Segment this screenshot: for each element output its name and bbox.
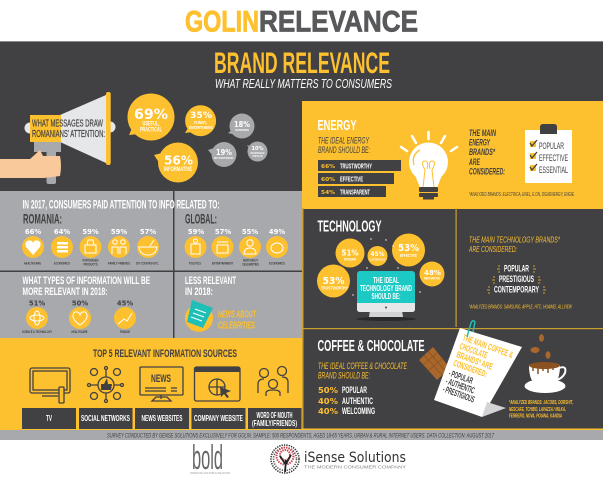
panel: coffee & chocolate: WELCOMING bbox=[342, 406, 375, 417]
panel: energy: EFFECTIVE bbox=[340, 174, 363, 184]
icon: monitor bbox=[356, 271, 416, 321]
survey note bar bbox=[0, 430, 603, 440]
paper clip bbox=[467, 321, 475, 337]
panel: attention topics: MORE RELEVANT IN 2018: bbox=[22, 286, 108, 298]
panel: coffee & chocolate: 40% bbox=[318, 397, 338, 406]
energy brands heading: CONSIDERED: bbox=[469, 166, 505, 178]
coffee brands footnote: FERRERO, NOVA, POIANA, KANDIA bbox=[509, 414, 562, 420]
bubble: 69% useful: PRACTICAL bbox=[140, 128, 162, 134]
panel: coffee & chocolate bbox=[302, 321, 603, 430]
tech bubble labels: 53% bbox=[398, 243, 419, 254]
panel: top 5 sources: SOCIAL NETWORKS bbox=[81, 414, 130, 423]
panel: top 5 sources: TV bbox=[46, 414, 52, 423]
bubble: 69% useful: USEFUL, bbox=[142, 122, 160, 128]
icon: news page bbox=[185, 300, 213, 332]
panel: attention topics: WHAT TYPES OF INFORMATION WILL BE bbox=[22, 275, 150, 287]
topic percentages: 59% bbox=[188, 228, 204, 236]
tech bubble labels: INNOVATIVE bbox=[424, 276, 441, 280]
panel: coffee & chocolate: THE IDEAL COFFEE & CHOCOLATE bbox=[318, 361, 407, 372]
tech bubble labels: CUSTOMIZABLE bbox=[370, 258, 386, 262]
topic percentages: 49% bbox=[269, 228, 285, 236]
bubble: 35% funny: 35% bbox=[190, 111, 212, 121]
icon: monitor: THE IDEAL bbox=[373, 275, 399, 285]
bubble: 10%: POPULAR bbox=[252, 154, 262, 158]
panel: energy: TRUSTWORTHY bbox=[340, 162, 372, 170]
panel: attention topics: GLOBAL: bbox=[185, 210, 217, 226]
icon: monitor: SHOULD BE: bbox=[372, 291, 401, 301]
tech bubble labels: 53% bbox=[322, 276, 344, 287]
panel: attention topics bbox=[0, 191, 302, 338]
topic percentages: 59% bbox=[111, 228, 127, 236]
icon: light bulb bbox=[401, 132, 457, 200]
energy brands heading: BRANDS* bbox=[469, 147, 496, 158]
tech bubble labels: TRUSTWORTHY bbox=[321, 286, 348, 290]
topic percentages: 59% bbox=[82, 228, 99, 236]
panel: top 5 sources: WORD OF MOUTH bbox=[256, 411, 293, 420]
logo: Golin Relevance bbox=[185, 6, 418, 38]
bubble: 35% funny: ENTERTAINING bbox=[189, 125, 213, 130]
topic labels: NEWS ABOUT bbox=[243, 258, 259, 262]
topic percentages: 64% bbox=[54, 228, 70, 236]
tech bubble labels bbox=[321, 243, 441, 290]
clipboard bbox=[525, 124, 572, 183]
note paper: BRANDS* ARE bbox=[455, 349, 494, 372]
source icons bbox=[30, 366, 288, 403]
topic labels: POLITICS bbox=[189, 262, 201, 266]
panel: energy: TRANSPARENT bbox=[340, 188, 370, 196]
bubble: 18%: SURPRISING bbox=[235, 128, 249, 132]
panel: technology: TECHNOLOGY bbox=[318, 219, 382, 236]
topic percentages: 57% bbox=[140, 228, 156, 236]
panel: attention topics: 45% bbox=[117, 300, 133, 308]
panel: coffee & chocolate: BRAND SHOULD BE: bbox=[318, 370, 370, 382]
forecast labels: FINANCE bbox=[120, 330, 130, 334]
panel: energy: 54% bbox=[321, 190, 336, 196]
bubble: 10%: 10% bbox=[252, 146, 264, 152]
coffee brands footnote: NESCAFE, TCHIBO, LAVAZZA / MILKA, bbox=[509, 407, 566, 413]
panel: attention topics: NEWS ABOUT bbox=[218, 310, 256, 321]
panel: energy: 60% bbox=[321, 177, 336, 183]
panel: coffee & chocolate: 50% bbox=[318, 386, 338, 395]
panel: attention topics: ROMANIA: bbox=[23, 210, 62, 226]
panel: top 5 sources: NEWS WEBSITES bbox=[142, 414, 183, 423]
forecast labels bbox=[22, 330, 130, 334]
bubble: 56% informative: 56% bbox=[164, 154, 193, 168]
source labels bbox=[22, 408, 302, 429]
megaphone with question: WHAT MESSAGES DRAW bbox=[32, 119, 103, 130]
bubble: 18% bbox=[228, 114, 254, 138]
note paper: CHOCOLATE bbox=[458, 341, 489, 360]
technology brand attributes: PRESTIGIOUS bbox=[499, 274, 534, 285]
logo: bold: bold bbox=[192, 439, 223, 477]
bubble: 18%: 18% bbox=[234, 120, 250, 129]
energy bars bbox=[318, 160, 401, 197]
note paper: - PRESTIGIOUS bbox=[442, 384, 476, 405]
panel: coffee & chocolate: COFFEE & CHOCOLATE bbox=[318, 338, 424, 355]
panel: top 5 sources: (FAMILY/FRIENDS) bbox=[252, 419, 297, 428]
topic labels: ECONOMICS bbox=[269, 262, 285, 266]
panel: top 5 sources: COMPANY WEBSITE bbox=[194, 414, 243, 423]
topic icons bbox=[25, 240, 68, 255]
note paper: - POPULAR bbox=[447, 368, 475, 386]
clipboard: POPULAR bbox=[539, 141, 564, 152]
panel: coffee & chocolate: AUTHENTIC bbox=[342, 396, 373, 407]
logo: iSense Solutions bbox=[270, 444, 406, 474]
panel: attention topics: 50% bbox=[72, 300, 88, 308]
panel: coffee & chocolate: 40% bbox=[318, 407, 338, 416]
clipboard: EFFECTIVE bbox=[539, 153, 568, 164]
logo: Golin Relevance: GOLIN bbox=[185, 6, 259, 38]
icon: chocolate bbox=[419, 347, 450, 380]
note paper: - AUTHENTIC bbox=[444, 376, 476, 396]
energy brands heading: ENERGY bbox=[469, 138, 491, 148]
bubble: 35% funny bbox=[185, 105, 216, 136]
panel: attention topics: IN 2018: bbox=[185, 286, 213, 298]
panel: attention topics: CELEBRITIES bbox=[218, 320, 255, 332]
topic labels: ENTERTAINMENT bbox=[212, 262, 234, 266]
panel: coffee & chocolate: POPULAR bbox=[342, 385, 367, 396]
panel: technology: ARE CONSIDERED: bbox=[468, 244, 517, 254]
bubble: 56% informative: INFORMATIVE bbox=[164, 167, 192, 173]
panel: energy: 66% bbox=[321, 164, 336, 170]
tech bubble labels: EFFECTIVE bbox=[400, 253, 417, 258]
panel: top 5 sources bbox=[0, 338, 302, 430]
panel: attention topics: IN 2017, CONSUMERS PAID ATTENTION TO INFO RELATED TO: bbox=[22, 200, 220, 212]
bubble: 19% bbox=[208, 142, 236, 167]
panel: energy bbox=[302, 101, 603, 208]
bubble: 10% bbox=[247, 142, 268, 162]
topic labels bbox=[24, 258, 285, 266]
energy brands heading: THE MAIN bbox=[469, 128, 497, 139]
panel: energy: BRAND SHOULD BE: bbox=[318, 145, 370, 156]
coffee brands footnote bbox=[509, 400, 573, 420]
forecast labels: HEALTHCARE bbox=[72, 330, 88, 334]
panel: top 5 sources: NEWS bbox=[151, 373, 171, 385]
subtitle: WHAT REALLY MATTERS TO CONSUMERS bbox=[215, 76, 392, 91]
tech bubble labels: 51% bbox=[342, 248, 358, 258]
logo: iSense Solutions: THE MODERN CONSUMER COMPANY bbox=[304, 464, 406, 470]
icon: monitor: TECHNOLOGY BRAND bbox=[360, 283, 412, 293]
technology brand attributes: POPULAR bbox=[504, 264, 529, 275]
energy brands heading: ARE bbox=[468, 157, 480, 168]
technology brand attributes bbox=[494, 264, 539, 296]
megaphone with question: ROMANIANS' ATTENTION: bbox=[32, 129, 105, 140]
technology brand attributes: CONTEMPORARY bbox=[494, 285, 539, 296]
energy brands heading bbox=[468, 128, 505, 178]
panel: attention topics: 51% bbox=[29, 300, 45, 308]
topic labels: HEALTHCARE bbox=[24, 262, 41, 266]
megaphone with question bbox=[0, 92, 116, 184]
topic circles bbox=[22, 236, 288, 258]
tech bubble labels: 45% bbox=[370, 250, 385, 258]
bubble: 69% useful: 69% bbox=[134, 107, 168, 123]
logo: iSense Solutions: iSense Solutions bbox=[304, 450, 406, 466]
clipboard: ESSENTIAL bbox=[539, 165, 568, 176]
tech bubbles bbox=[317, 234, 444, 298]
tech bubble labels: MODERN bbox=[344, 256, 356, 262]
topic labels: FAMILY FRIENDS bbox=[108, 262, 130, 266]
panel: top 5 sources: TOP 5 RELEVANT INFORMATION SOURCES bbox=[93, 348, 237, 360]
forecast labels: SCIENCE & TECHNOLOGY bbox=[22, 330, 52, 334]
note paper bbox=[434, 321, 522, 417]
bubble: 35% funny: FUNNY, bbox=[194, 120, 207, 125]
panel: attention topics: LESS RELEVANT bbox=[185, 275, 236, 287]
logo: bold bbox=[190, 439, 230, 477]
title: BRAND RELEVANCE bbox=[214, 47, 390, 80]
bubble: 56% informative bbox=[154, 142, 198, 182]
bubble: 19%: 19% bbox=[216, 148, 232, 157]
topic labels: PURCHASED bbox=[82, 258, 99, 262]
note paper: THE MAIN COFFEE & bbox=[461, 332, 515, 360]
topic percentages: 57% bbox=[215, 228, 231, 236]
topic percentages bbox=[25, 228, 285, 236]
panel: energy: ENERGY bbox=[318, 117, 356, 134]
bubble: 69% useful bbox=[128, 94, 174, 140]
logo: Golin Relevance: RELEVANCE bbox=[259, 6, 418, 38]
topic labels: PRODUCTS bbox=[84, 262, 98, 266]
logo: bold: MARKETING AND PUBLIC RELATIONS bbox=[190, 472, 230, 475]
topic labels: CELEBRITIES bbox=[242, 262, 259, 266]
tech bubble labels: 48% bbox=[424, 269, 441, 277]
bubble: 10%: REASONABLE bbox=[250, 151, 265, 155]
note paper: CONSIDERED: bbox=[452, 358, 488, 379]
topic percentages: 55% bbox=[242, 228, 258, 236]
topic labels: DIY COOKING ETC. bbox=[136, 262, 159, 266]
topic labels: ECONOMICS bbox=[54, 262, 70, 266]
topic percentages: 66% bbox=[25, 228, 41, 236]
icon: coffee cup bbox=[524, 334, 566, 393]
panel: energy: THE IDEAL ENERGY bbox=[318, 136, 369, 146]
panel: technology bbox=[302, 208, 603, 329]
bubble: 19%: MOTIVATIONAL bbox=[214, 156, 234, 160]
